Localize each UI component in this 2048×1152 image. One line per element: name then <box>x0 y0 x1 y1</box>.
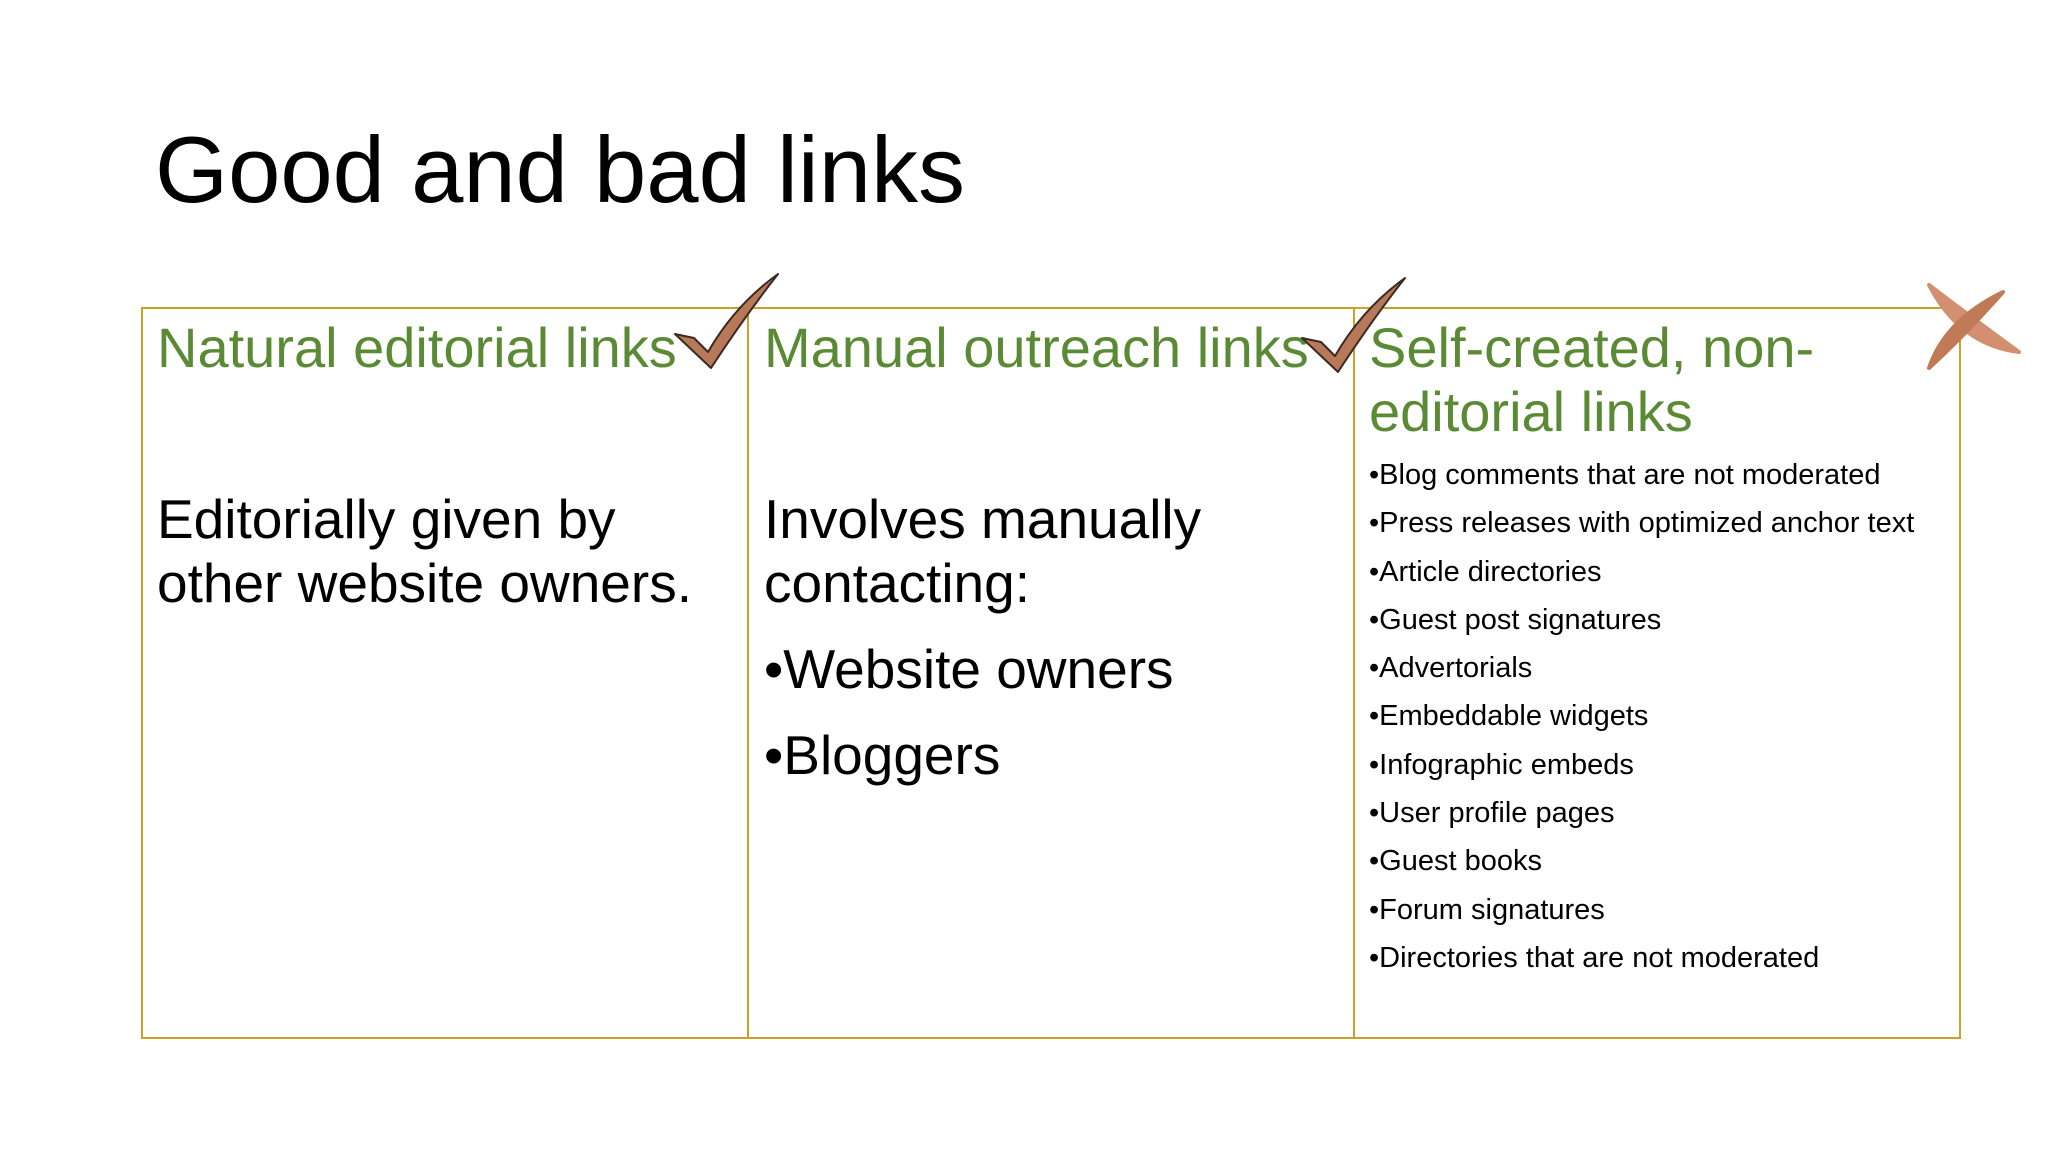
list: bad link types: •Article directories <box>1369 556 1602 588</box>
text: natural description: Editorially given by <box>157 488 616 550</box>
text: natural description <box>157 488 692 614</box>
text: manual description: Involves manually <box>764 488 1201 550</box>
panel: manual outreach links <box>764 316 1309 786</box>
text: manual description <box>764 488 1201 614</box>
title: Good and bad links <box>155 117 965 222</box>
heading: natural editorial links: Natural editorial links <box>157 316 677 379</box>
list: bad link types: •Forum signatures <box>1369 894 1605 926</box>
heading: manual outreach links: Manual outreach links <box>764 316 1309 379</box>
list: bad link types: •Directories that are not moderated <box>1369 942 1819 974</box>
heading: self-created: editorial links <box>1369 380 1693 443</box>
list: bad link types: •Guest books <box>1369 845 1542 877</box>
list: bad link types: •Advertorials <box>1369 652 1532 684</box>
icon: X mark <box>1926 282 2021 370</box>
list: bad link types: •Guest post signatures <box>1369 604 1661 636</box>
icon: check mark 2 <box>1301 277 1406 373</box>
table frame <box>141 307 1961 1039</box>
text: natural description: other website owners. <box>157 552 692 614</box>
bullet: bloggers: •Bloggers <box>764 724 1000 786</box>
list: bad link types: •Infographic embeds <box>1369 749 1634 781</box>
heading: self-created: Self-created, non- <box>1369 316 1814 379</box>
list: bad link types: •Blog comments that are not moderated <box>1369 459 1880 491</box>
icon: check mark 1 <box>674 273 779 369</box>
panel: self-created non-editorial links <box>1369 316 1914 974</box>
bullet: website owners: •Website owners <box>764 638 1174 700</box>
heading: self-created <box>1369 316 1814 443</box>
panel: natural editorial links <box>157 316 692 614</box>
list: bad link types: •Embeddable widgets <box>1369 700 1648 732</box>
list: bad link types <box>1369 459 1914 974</box>
list: bad link types: •User profile pages <box>1369 797 1614 829</box>
text: manual description: contacting: <box>764 552 1030 614</box>
list: bad link types: •Press releases with optimized anchor text <box>1369 507 1914 539</box>
